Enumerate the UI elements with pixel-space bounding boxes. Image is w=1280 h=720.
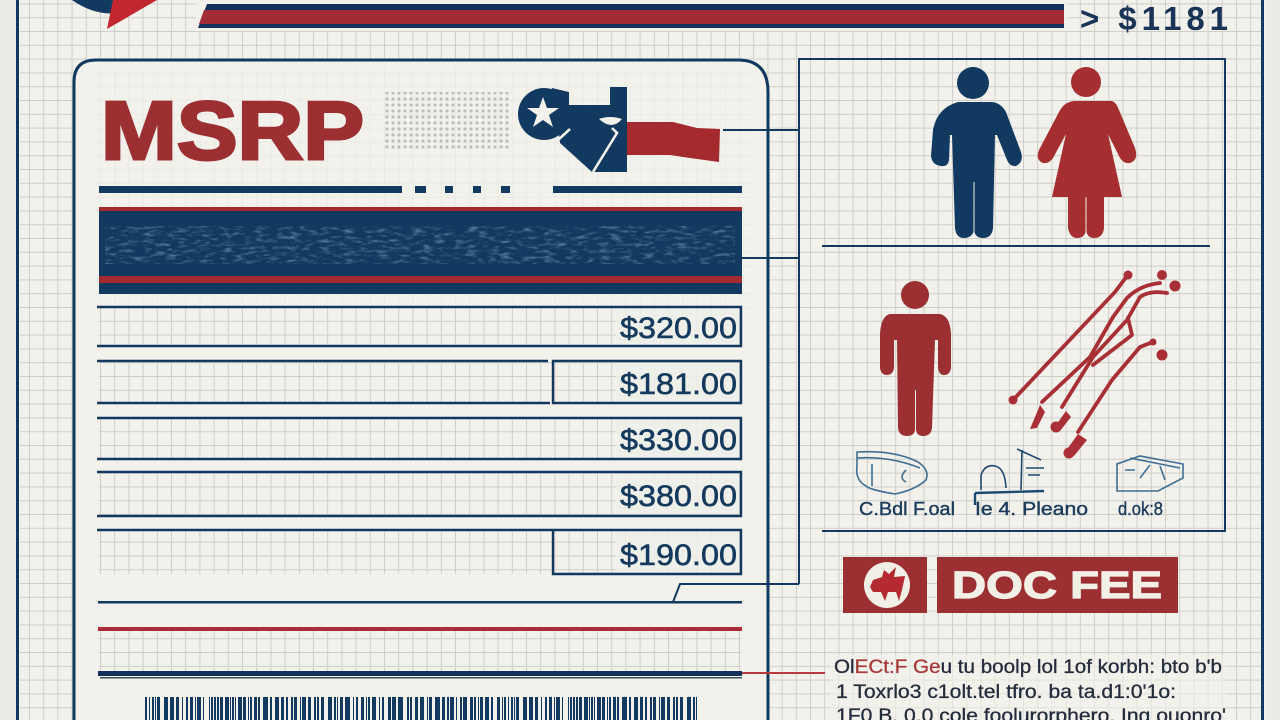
icon: red wires <box>1008 270 1180 458</box>
heading: MSRP: MSRP <box>101 84 364 177</box>
text block: fee note <box>830 655 1226 720</box>
amount: row 4: $380.00 <box>620 480 737 513</box>
badge: doc fee: DOC FEE <box>952 565 1162 607</box>
grey dotted smudge <box>384 92 510 150</box>
blue banner <box>99 207 742 294</box>
panel: people and costs <box>799 59 1225 584</box>
labels under sketches: Ie 4. Pleano <box>975 499 1088 519</box>
badge: doc fee <box>843 557 1178 613</box>
text block: fee note: OlECt:F Ge u tu boolp lol 1of korbh: bto b'b <box>834 657 1222 678</box>
amount: row 3: $330.00 <box>620 424 737 457</box>
icon: red woman <box>1038 67 1136 238</box>
icon: navy man <box>931 67 1022 238</box>
icon: sketch 2 <box>975 449 1044 505</box>
labels under sketches: d.ok:8 <box>1118 499 1163 519</box>
labels under sketches <box>859 499 1163 519</box>
panel: receipt <box>74 60 768 720</box>
icon: speech bubble logo <box>72 0 157 29</box>
header amount: > $1181 <box>1080 0 1228 37</box>
dashed divider <box>99 186 742 193</box>
labels under sketches: C.Bdl F.oal <box>859 499 955 519</box>
amount: row 5: $190.00 <box>620 539 737 572</box>
total lines <box>98 601 742 678</box>
icon: sketch 1 <box>857 452 927 494</box>
amount: row 2: $181.00 <box>620 368 737 401</box>
receipt faint grid <box>92 68 752 308</box>
line item rows <box>97 307 741 574</box>
header bar <box>196 0 1068 31</box>
icon: sketch 3 <box>1117 456 1183 491</box>
icon: red person <box>880 281 951 436</box>
amount backgrounds <box>616 309 739 572</box>
icon: star flag emblem <box>518 87 720 172</box>
barcode <box>145 697 697 720</box>
amount: row 1: $320.00 <box>620 312 737 345</box>
text block: fee note: 1 Toxrlo3 c1olt.tel tfro. ba ta.d1:0'1o: <box>836 682 1176 703</box>
connector lines <box>673 130 825 673</box>
